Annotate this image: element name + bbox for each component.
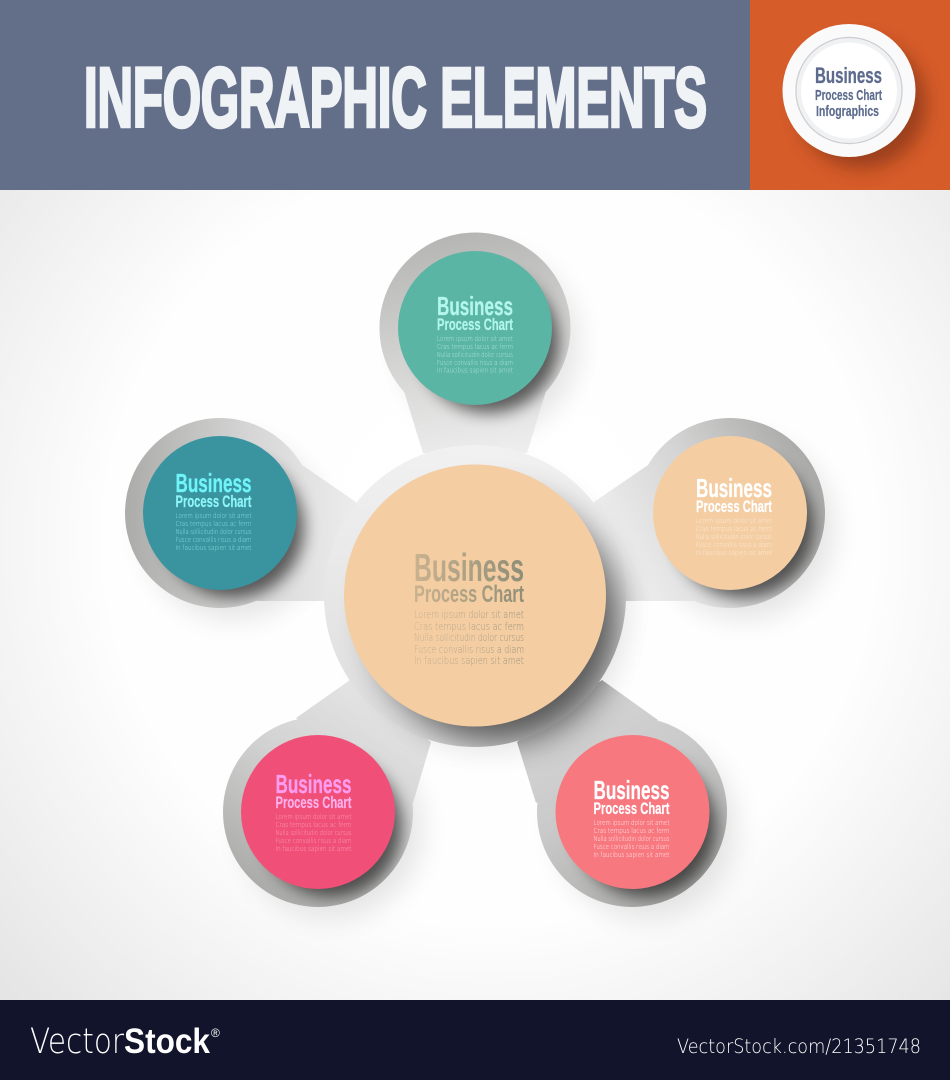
header banner — [0, 0, 750, 190]
panel: bottom-left circle: Business — [276, 769, 352, 799]
panel: bottom-right circle: Business — [594, 775, 670, 805]
panel: bottom-right circle: Nulla sollicitudin dolor cursus — [594, 835, 670, 843]
panel: center circle — [344, 464, 606, 726]
panel: top circle: Cras tempus lacus ac ferm — [437, 343, 513, 351]
panel: bottom-left circle: Process Chart — [276, 794, 352, 812]
panel: right circle: Nulla sollicitudin dolor cursus — [696, 533, 772, 541]
footer bar: VectorStock.com/21351748 — [677, 1035, 921, 1058]
panel: bottom-right circle: Lorem ipsum dolor sit amet — [594, 819, 670, 827]
panel: top circle — [398, 251, 552, 405]
panel: top circle: Nulla sollicitudin dolor cursus — [437, 351, 513, 359]
panel: top circle: In faucibus sapien sit amet — [437, 366, 513, 374]
panel: left circle: In faucibus sapien sit amet — [176, 544, 252, 552]
panel: right circle: In faucibus sapien sit amet — [696, 549, 772, 557]
panel: top circle: Lorem ipsum dolor sit amet — [437, 335, 513, 343]
panel: bottom-left circle: Lorem ipsum dolor sit amet — [276, 813, 352, 821]
title: INFOGRAPHIC ELEMENTS — [84, 51, 707, 145]
panel: right circle: Process Chart — [696, 498, 772, 516]
panel: center circle: Lorem ipsum dolor sit amet — [414, 609, 524, 621]
panel: right circle — [653, 436, 807, 590]
orange badge panel: Infographics — [816, 104, 879, 120]
process diagram base shape — [125, 232, 834, 918]
panel: center circle: In faucibus sapien sit amet — [414, 655, 524, 667]
panel: bottom-right circle: Fusce convallis risus a diam — [594, 843, 670, 851]
panel: right circle: Business — [696, 473, 772, 503]
footer bar — [0, 1000, 950, 1080]
panel: top circle: Process Chart — [437, 316, 513, 334]
panel: right circle: Fusce convallis risus a diam — [696, 541, 772, 549]
background — [0, 190, 950, 1000]
panel: bottom-left circle: In faucibus sapien sit amet — [276, 845, 352, 853]
panel: bottom-right circle: Cras tempus lacus ac ferm — [594, 827, 670, 835]
panel: left circle: Process Chart — [176, 493, 252, 511]
panel: left circle: Fusce convallis risus a diam — [176, 536, 252, 544]
orange badge panel: Business — [815, 63, 882, 88]
panel: left circle: Nulla sollicitudin dolor cursus — [176, 528, 252, 536]
panel: bottom-left circle: Nulla sollicitudin dolor cursus — [276, 829, 352, 837]
panel: center circle: Nulla sollicitudin dolor cursus — [414, 632, 524, 644]
panel: left circle: Lorem ipsum dolor sit amet — [176, 512, 252, 520]
footer bar: Vector — [30, 1022, 125, 1062]
panel: center circle: Fusce convallis risus a diam — [414, 644, 524, 656]
footer bar: Stock — [124, 1022, 210, 1061]
panel: top circle: Fusce convallis risus a diam — [437, 359, 513, 367]
panel: bottom-right circle — [556, 735, 710, 889]
orange badge panel — [750, 0, 950, 190]
panel: center circle: Process Chart — [414, 581, 524, 608]
panel: right circle: Lorem ipsum dolor sit amet — [696, 517, 772, 525]
panel: bottom-left circle: Fusce convallis risus a diam — [276, 837, 352, 845]
footer bar: ® — [211, 1026, 220, 1040]
panel: bottom-right circle: Process Chart — [594, 800, 670, 818]
panel: bottom-right circle: In faucibus sapien sit amet — [594, 851, 670, 859]
orange badge panel: Process Chart — [815, 87, 882, 104]
panel: right circle: Cras tempus lacus ac ferm — [696, 525, 772, 533]
panel: center circle: Cras tempus lacus ac ferm — [414, 621, 524, 633]
panel: left circle: Business — [176, 468, 252, 498]
panel: top circle: Business — [437, 291, 513, 321]
panel: bottom-left circle: Cras tempus lacus ac ferm — [276, 821, 352, 829]
panel: left circle: Cras tempus lacus ac ferm — [176, 520, 252, 528]
panel: bottom-left circle — [241, 735, 395, 889]
panel: left circle — [143, 436, 297, 590]
panel: center circle: Business — [414, 547, 524, 590]
